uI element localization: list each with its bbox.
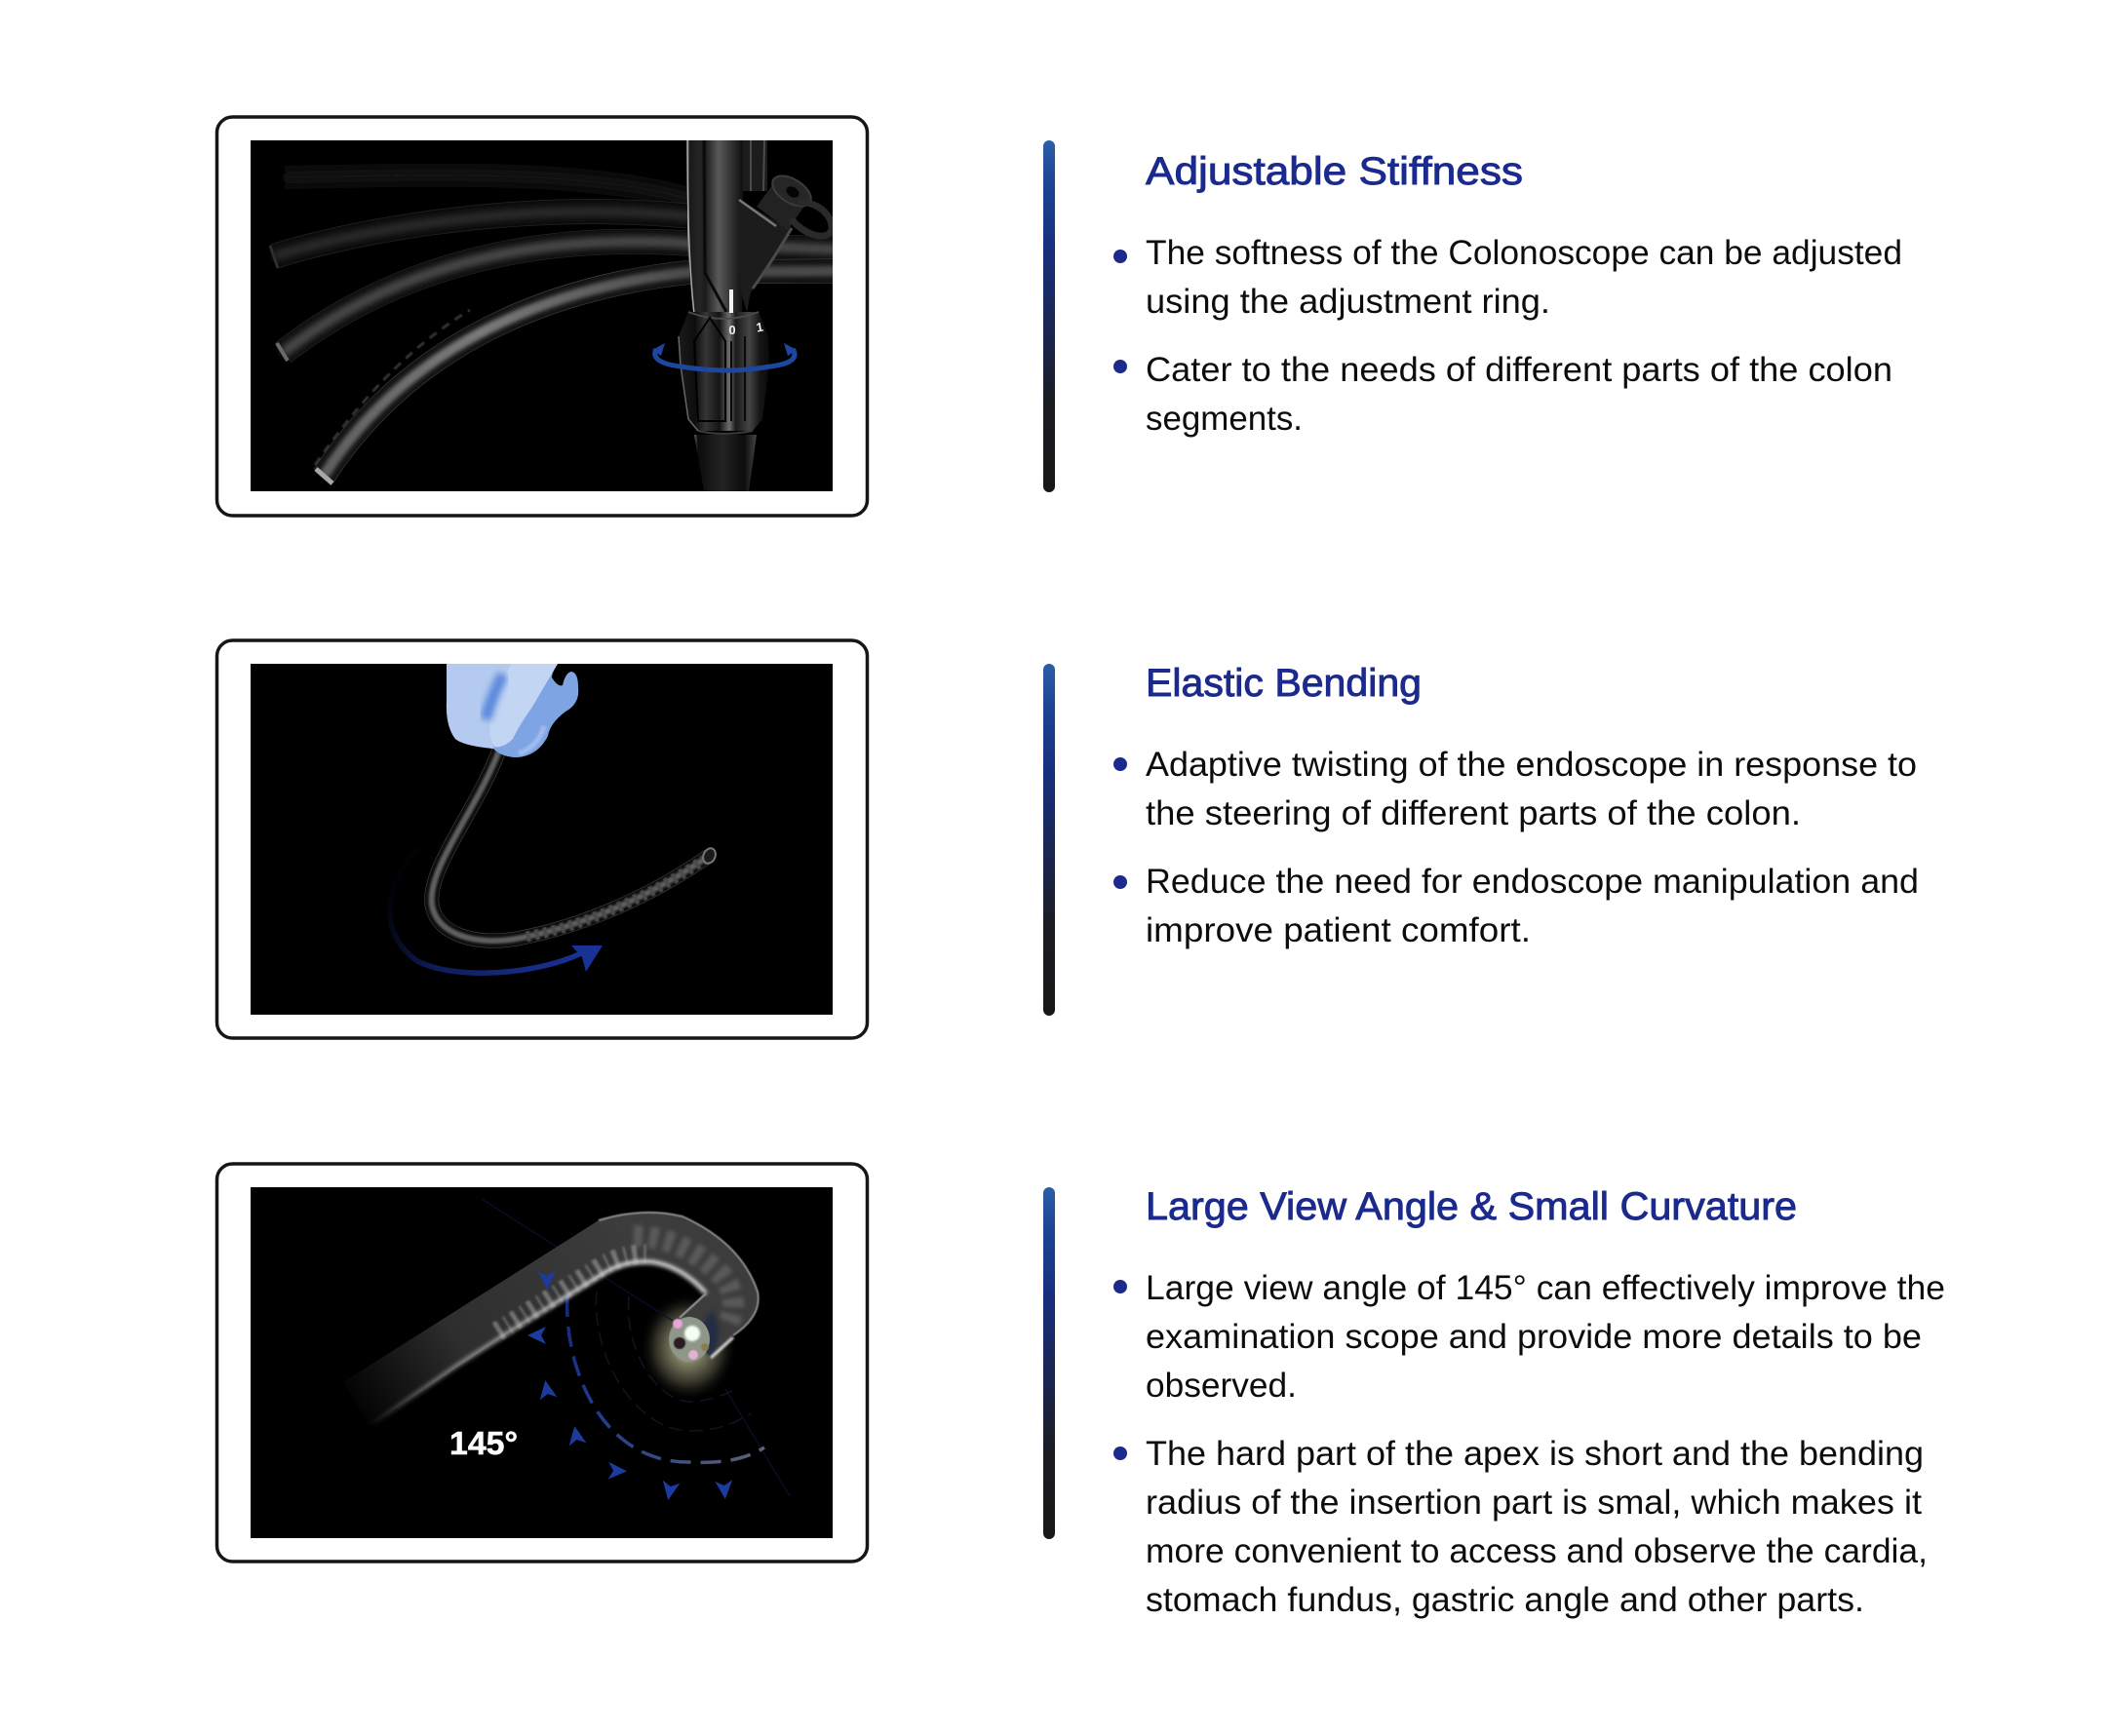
blue rotation arrow bbox=[652, 343, 797, 370]
insertion tube bbox=[432, 748, 718, 941]
bullet 2: stomach fundus, gastric angle and other parts. bbox=[1146, 1581, 1864, 1619]
bullet 2: more convenient to access and observe the cardia, bbox=[1146, 1532, 1928, 1570]
text block: elastic bending bbox=[1113, 662, 1919, 949]
tip glow bbox=[645, 1300, 731, 1394]
bullet 1 bbox=[1113, 746, 1917, 832]
bullet 1 bbox=[1113, 234, 1902, 321]
tube, medium soft setting bbox=[270, 212, 692, 268]
bend direction arrow bbox=[387, 889, 603, 976]
outer dashed view arc bbox=[567, 1296, 764, 1462]
bullet 1: observed. bbox=[1146, 1367, 1297, 1405]
bullet 2: Reduce the need for endoscope manipulation and bbox=[1146, 863, 1919, 901]
dim inner view arcs bbox=[596, 1292, 751, 1431]
text block: adjustable stiffness bbox=[1113, 150, 1902, 438]
bullet 1: The softness of the Colonoscope can be adjusted bbox=[1146, 234, 1902, 272]
bullet 1: using the adjustment ring. bbox=[1146, 283, 1550, 321]
tube, stiffest setting bbox=[315, 271, 838, 483]
heading: elastic bending: Elastic Bending bbox=[1146, 662, 1422, 705]
scope tip lens face bbox=[669, 1317, 710, 1362]
bullet 1: examination scope and provide more details to be bbox=[1146, 1318, 1922, 1356]
image: scope tip with 145 degree view bbox=[251, 1187, 833, 1538]
panel: view angle image card bbox=[216, 1164, 868, 1562]
bullet 2: Cater to the needs of different parts of the colon bbox=[1146, 351, 1892, 389]
bullet 2: improve patient comfort. bbox=[1146, 911, 1531, 949]
side port with cap bbox=[739, 170, 832, 312]
bullet 2: radius of the insertion part is smal, which makes it bbox=[1146, 1484, 1922, 1522]
bullet 2 bbox=[1113, 863, 1919, 949]
bullet 1: the steering of different parts of the colon. bbox=[1146, 794, 1801, 832]
bending tube bbox=[343, 1213, 759, 1426]
faint field-of-view lines bbox=[482, 1199, 790, 1496]
accent bar: view angle bbox=[1043, 1187, 1055, 1539]
tube, medium stiff setting bbox=[277, 242, 838, 361]
blue direction arrowheads bbox=[527, 1271, 734, 1501]
panel: elastic bending image card bbox=[216, 640, 868, 1038]
accent bar: adjustable stiffness bbox=[1043, 140, 1055, 492]
ring scale numbers: 0 bbox=[728, 323, 736, 337]
text block: view angle bbox=[1113, 1185, 1945, 1619]
angle label: 145° bbox=[449, 1425, 518, 1461]
bullet 1: Adaptive twisting of the endoscope in response to bbox=[1146, 746, 1917, 784]
ring scale numbers: 1 bbox=[755, 320, 764, 335]
bullet 1 bbox=[1113, 1269, 1945, 1405]
bullet 2 bbox=[1113, 1435, 1928, 1619]
heading: adjustable stiffness: Adjustable Stiffness bbox=[1146, 150, 1523, 193]
ring scale numbers bbox=[729, 323, 764, 334]
bullet 2: The hard part of the apex is short and the bending bbox=[1146, 1435, 1924, 1473]
lower cone bbox=[694, 435, 757, 491]
ring index mark bbox=[729, 289, 733, 313]
adjustment ring bbox=[679, 312, 769, 434]
faint tube, softest setting bbox=[285, 175, 692, 200]
image: colonoscope with adjustment ring bbox=[251, 140, 838, 491]
gloved hand bbox=[447, 664, 578, 757]
bullet 2 bbox=[1113, 351, 1892, 438]
bullet 1: Large view angle of 145° can effectively improve the bbox=[1146, 1269, 1945, 1307]
bullet 2: segments. bbox=[1146, 400, 1303, 438]
accent bar: elastic bending bbox=[1043, 664, 1055, 1016]
image: gloved hand bending the scope bbox=[251, 664, 833, 1015]
panel: adjustable stiffness image card bbox=[216, 117, 868, 516]
control body bbox=[687, 140, 767, 322]
heading: view angle: Large View Angle & Small Curvature bbox=[1146, 1185, 1797, 1228]
